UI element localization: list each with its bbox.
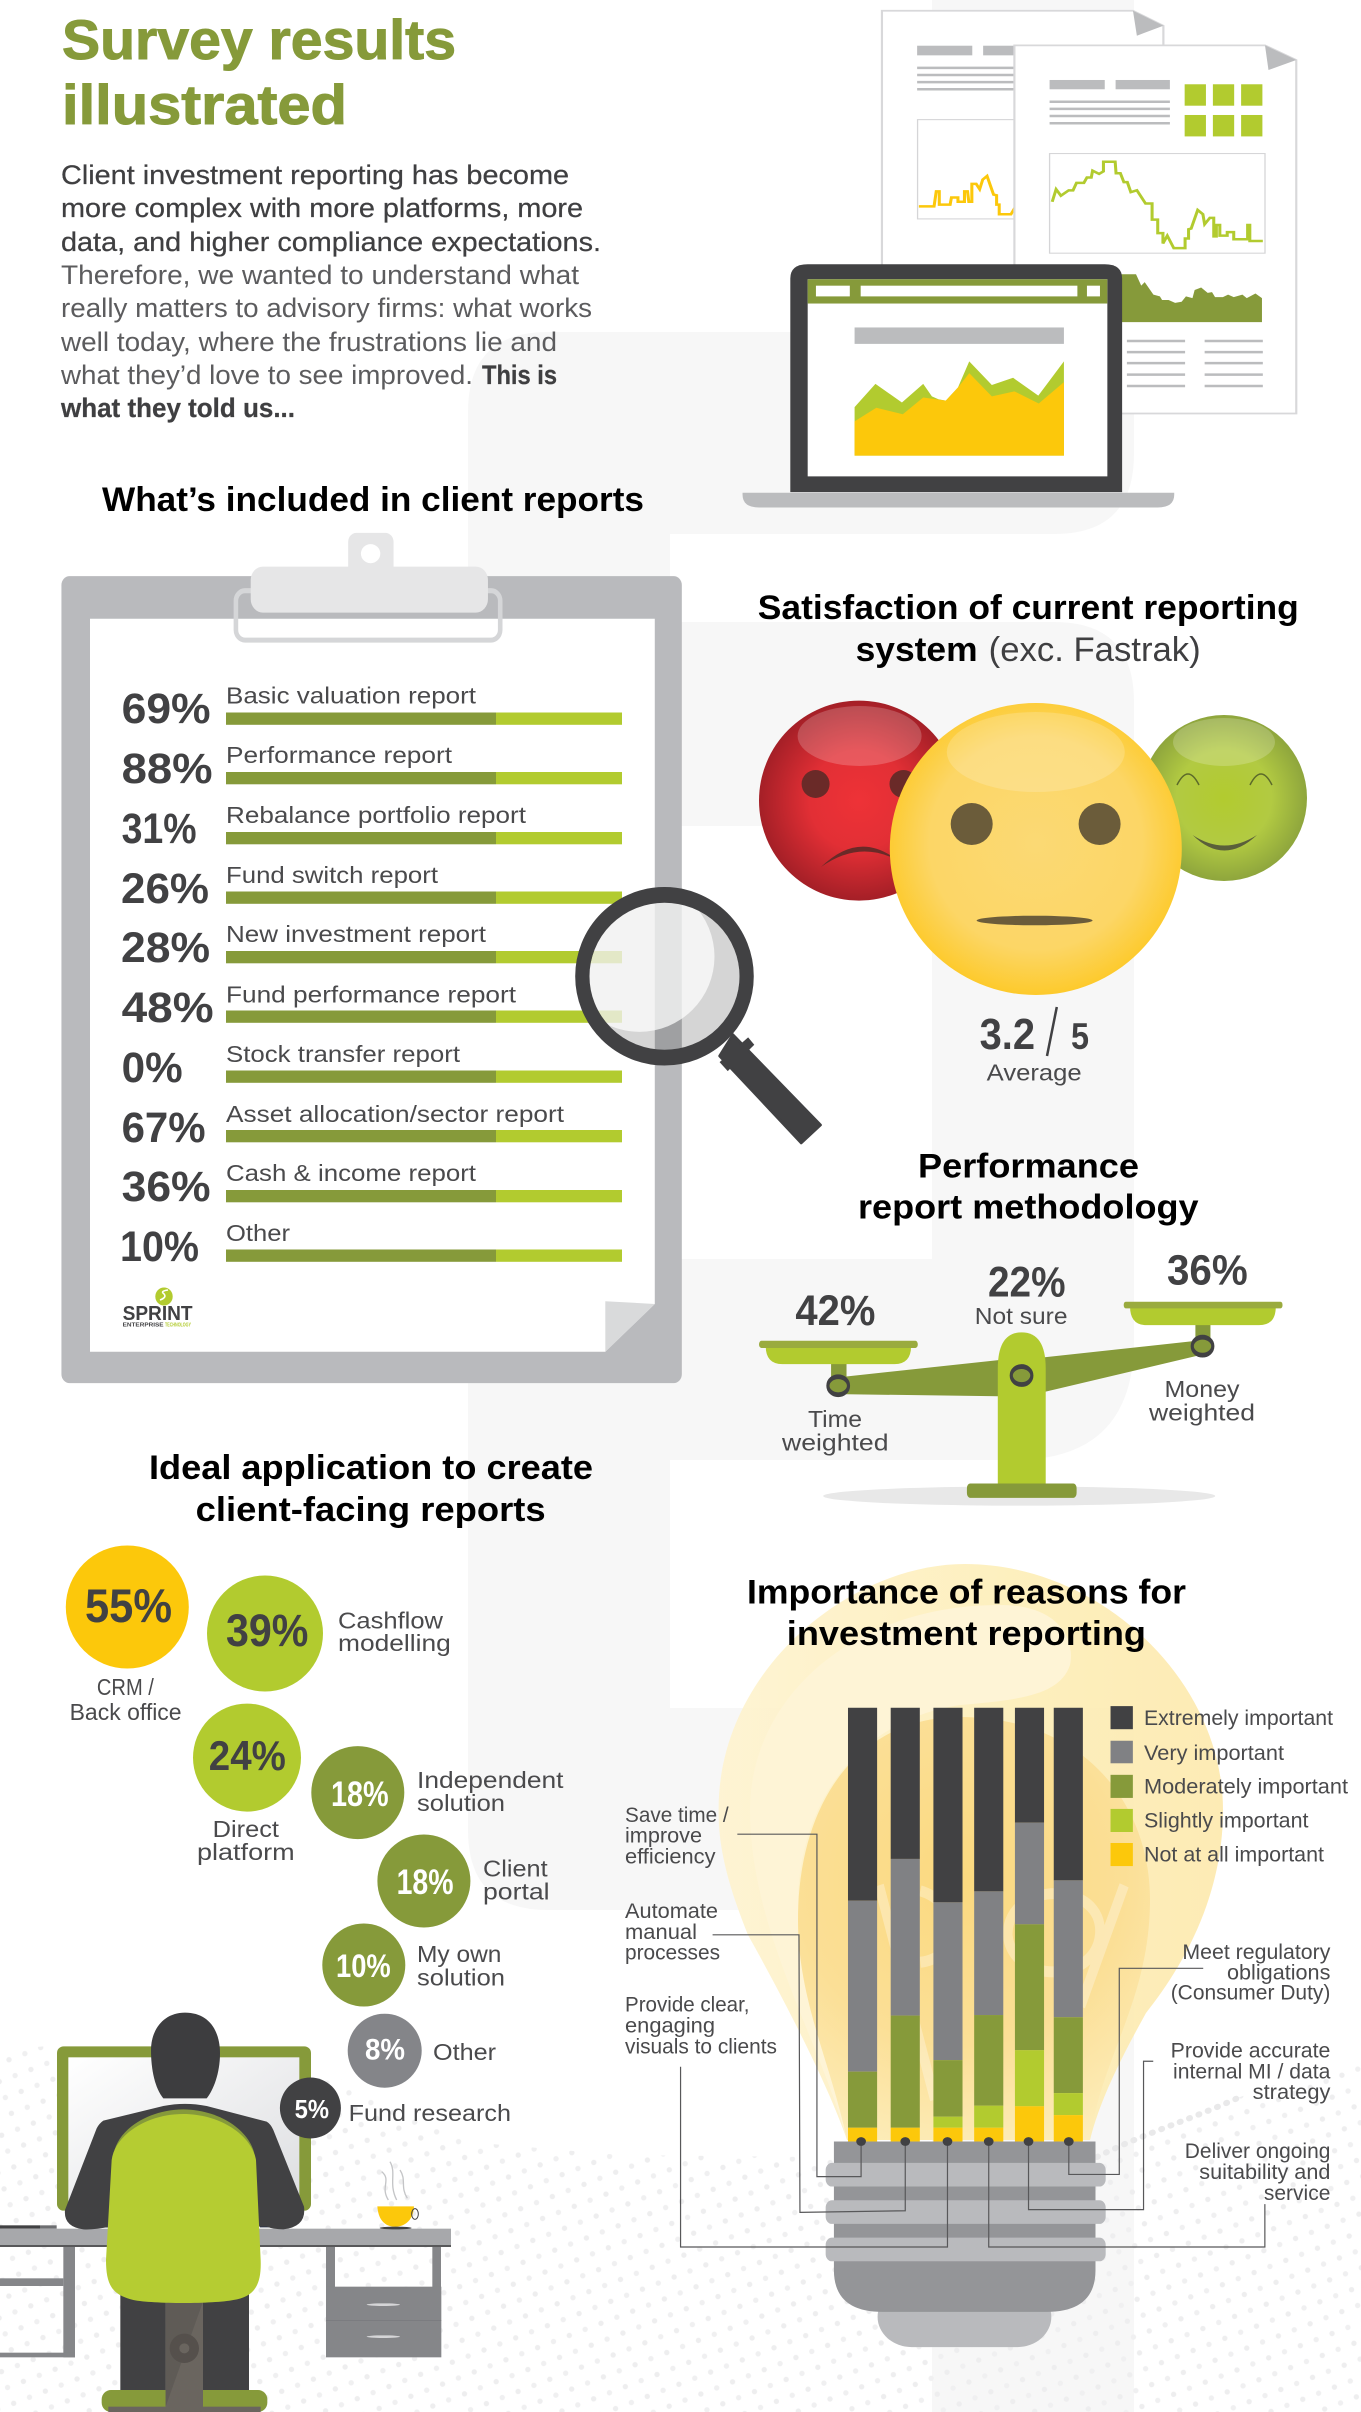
person [65,2013,304,2412]
report labels: Fund performance report [226,982,517,1008]
heading: satisfaction: system [856,631,978,669]
callouts: right labels: Provide accurate [1171,2039,1330,2062]
bubble: direct platform: platform [197,1839,295,1865]
connector lines [681,1834,1265,2247]
legend labels: Slightly important [1144,1810,1309,1833]
intro text block: This is [482,360,557,390]
icon: sad face [759,701,959,901]
heading: methodology: Performance [918,1148,1139,1186]
heading: what's included: What’s included in client reports [102,481,644,519]
scale labels: 22% [988,1258,1066,1306]
report labels: Cash & income report [226,1160,477,1186]
background: large pale letter shape [468,0,1134,2412]
report percentages: 69% [122,685,211,733]
callouts: left labels: manual [625,1921,697,1944]
bubble: other: 8% [365,2033,405,2066]
report labels: New investment report [226,921,487,947]
scale labels: 42% [795,1287,875,1335]
bubble: fund research: 5% [295,2094,329,2124]
report percentages: 88% [122,745,213,793]
heading: ideal application: client-facing reports [196,1491,546,1529]
callouts: right labels: service [1264,2182,1330,2205]
panel: clipboard [61,533,682,1383]
bar: clear visuals [933,1708,963,2141]
bulb socket [826,2141,1106,2347]
report labels: Other [226,1220,290,1246]
callouts: right labels: obligations [1227,1961,1330,1984]
bubble: cashflow [207,1576,451,1692]
chart: balance scale [759,1302,1283,1506]
heading: importance [747,1573,1186,1653]
icon: neutral face [890,703,1182,995]
front report page [1014,45,1296,414]
illustration: reports and laptop [743,11,1296,507]
heading: satisfaction [758,589,1299,669]
callouts: right labels: Deliver ongoing [1185,2140,1330,2163]
report percentages: 0% [122,1044,183,1092]
report percentages [120,685,214,1271]
callouts: left labels: Save time / [625,1804,729,1827]
bubble: client portal: portal [483,1879,550,1905]
bar: accurate MI [1015,1708,1044,2141]
heading: importance: Importance of reasons for [747,1573,1186,1611]
bubble: other [348,2014,496,2088]
bubble: direct platform: Direct [213,1816,280,1842]
report labels: Performance report [226,742,453,768]
logo: Sprint [123,1288,193,1328]
callouts: left labels: processes [625,1942,720,1964]
bubble: own solution: solution [417,1964,505,1990]
callouts: left labels: engaging [625,2015,715,2038]
scale labels: weighted [781,1430,888,1456]
bubble: independent: Independent [417,1767,564,1793]
icon: coffee cup [377,2162,418,2229]
callouts: left labels: efficiency [625,1845,716,1868]
back report page [882,11,1163,286]
bubble: CRM: CRM / [97,1674,154,1700]
intro text block: what they’d love to see improved. [60,360,473,390]
report percentages: 28% [121,924,210,972]
intro text block: Therefore, we wanted to understand what [61,260,580,290]
bubble: own solution: My own [417,1941,501,1967]
title [62,8,456,136]
bubble: CRM [66,1546,189,1725]
title: Survey results [62,8,456,71]
bar: automate [891,1708,920,2141]
report percentages: 67% [122,1104,206,1152]
bubble: independent: 18% [331,1775,389,1814]
connector dots [856,2137,1074,2146]
bar: regulatory [1054,1708,1083,2141]
clipboard board and paper [61,533,682,1383]
scale labels: Not sure [975,1303,1068,1329]
bubble: independent [311,1746,564,1839]
heading: importance: investment reporting [787,1615,1146,1653]
scale labels: Time [808,1406,862,1432]
bubble chart: ideal application [66,1546,564,2138]
callouts: left labels: Provide clear, [625,1994,750,2017]
report bars [226,712,622,1262]
intro text block: what they told us... [60,393,295,423]
intro text block: more complex with more platforms, more [61,193,583,223]
intro text block: well today, where the frustrations lie and [60,327,557,357]
bubble: direct platform: 24% [209,1732,286,1779]
desk [0,2225,451,2357]
heading: ideal application: Ideal application to create [149,1449,593,1487]
scale labels: weighted [1148,1400,1255,1426]
satisfaction score: 3.2 [980,1010,1035,1059]
callouts: right labels [1171,1941,1331,2205]
bubble: cashflow: 39% [226,1605,308,1656]
bar: ongoing suitability [974,1708,1003,2141]
report labels: Rebalance portfolio report [226,802,527,828]
callouts: right labels: strategy [1253,2081,1331,2104]
monitor [57,2046,311,2214]
callouts: left labels: improve [625,1824,702,1847]
intro text block [60,160,601,423]
heading: methodology [858,1148,1199,1226]
background: dotted wave pattern [0,2045,1361,2412]
logo: Sprint: ENTERPRISE [123,1322,164,1328]
illustration: bulb bars and socket [681,1706,1265,2347]
laptop [743,264,1174,507]
report percentages: 36% [122,1163,211,1211]
report percentages: 26% [121,865,209,913]
callouts: right labels: Meet regulatory [1182,1941,1331,1964]
bubble: independent: solution [417,1790,505,1816]
satisfaction faces [759,701,1307,995]
stacked bars [848,1708,1083,2141]
report labels: Stock transfer report [226,1041,461,1067]
heading: satisfaction: (exc. Fastrak) [989,631,1201,669]
bubble: cashflow: Cashflow [338,1608,443,1634]
callouts: right labels: suitability and [1199,2161,1330,2184]
bubble: client portal: 18% [397,1863,454,1902]
intro text block: really matters to advisory firms: what works [61,293,592,323]
legend labels: Moderately important [1144,1776,1348,1798]
report percentages: 48% [122,984,214,1032]
heading: methodology: report methodology [858,1188,1199,1226]
callouts: left labels [625,1804,777,2058]
intro text block: Client investment reporting has become [61,160,569,190]
icon: happy face [1141,715,1307,881]
bubble: CRM: 55% [85,1579,172,1632]
bubble: client portal [377,1834,550,1928]
satisfaction score: Average [987,1060,1082,1086]
bubble: fund research [280,2078,511,2138]
bubble: CRM: Back office [70,1699,182,1725]
title: illustrated [62,73,347,136]
legend swatches [1111,1706,1133,1866]
logo: Sprint: TECHNOLOGY [165,1322,191,1328]
logo: Sprint: SPRINT [123,1303,193,1325]
bar: save time [848,1708,877,2141]
report labels: Fund switch report [226,862,439,888]
legend labels [1144,1707,1348,1867]
report percentages: 10% [120,1223,199,1271]
legend labels: Not at all important [1144,1844,1324,1867]
scale labels [781,1246,1255,1456]
bubble: own solution: 10% [336,1948,391,1984]
bubble: cashflow: modelling [338,1630,451,1656]
scale labels: Money [1164,1376,1240,1402]
report labels [226,682,565,1246]
callouts: right labels: (Consumer Duty) [1171,1982,1330,2005]
satisfaction score: 5 [1071,1016,1089,1057]
report percentages: 31% [122,805,197,853]
filament [879,1885,1124,2100]
bubble: other: Other [433,2039,496,2065]
report labels: Basic valuation report [226,682,477,708]
callouts: left labels: visuals to clients [625,2036,777,2058]
satisfaction score [980,1007,1089,1086]
callouts: left labels: Automate [625,1900,718,1923]
legend labels: Extremely important [1144,1707,1333,1730]
bubble: client portal: Client [483,1856,548,1882]
intro text block: data, and higher compliance expectations. [61,227,601,257]
icon: magnifying glass [564,881,821,1143]
report labels: Asset allocation/sector report [226,1101,565,1127]
legend labels: Very important [1144,1742,1284,1765]
illustration: bulb glass [719,1564,1223,2140]
bubble: direct platform [193,1704,301,1865]
illustration: person at desk [0,2013,451,2412]
bubble: own solution [322,1924,505,2006]
heading: ideal application [149,1449,593,1529]
bubble: fund research: Fund research [349,2100,511,2126]
callouts: right labels: internal MI / data [1173,2060,1331,2083]
heading: satisfaction: Satisfaction of current reporting [758,589,1299,627]
scale labels: 36% [1167,1246,1248,1294]
